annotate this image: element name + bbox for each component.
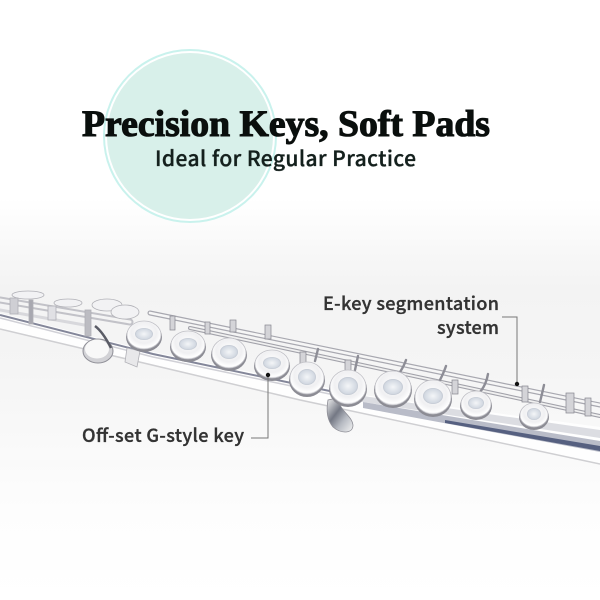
head-end keywork xyxy=(10,291,139,336)
callout: E-key segmentation system: E-key segmentation xyxy=(323,290,499,316)
subtitle: Ideal for Regular Practice xyxy=(155,143,416,173)
key arms xyxy=(315,349,544,402)
flute keys xyxy=(127,321,548,427)
callout: Off-set G-style key: Off-set G-style key xyxy=(82,422,244,448)
callout: E-key segmentation system: system xyxy=(437,314,499,340)
callout: Off-set G-style key xyxy=(82,373,270,448)
flute xyxy=(0,291,600,464)
decorative circle xyxy=(103,49,277,223)
thumb key xyxy=(83,326,113,363)
title: Precision Keys, Soft Pads xyxy=(82,104,490,145)
G-style key drop xyxy=(327,398,353,432)
flute key rims xyxy=(126,322,549,430)
tube shading bands xyxy=(0,315,600,464)
collar on tube xyxy=(125,348,140,367)
callout: E-key segmentation system xyxy=(323,290,519,386)
flute body tube xyxy=(0,313,600,464)
posts xyxy=(170,316,591,416)
upper rods xyxy=(0,300,600,416)
key centres xyxy=(135,328,541,420)
